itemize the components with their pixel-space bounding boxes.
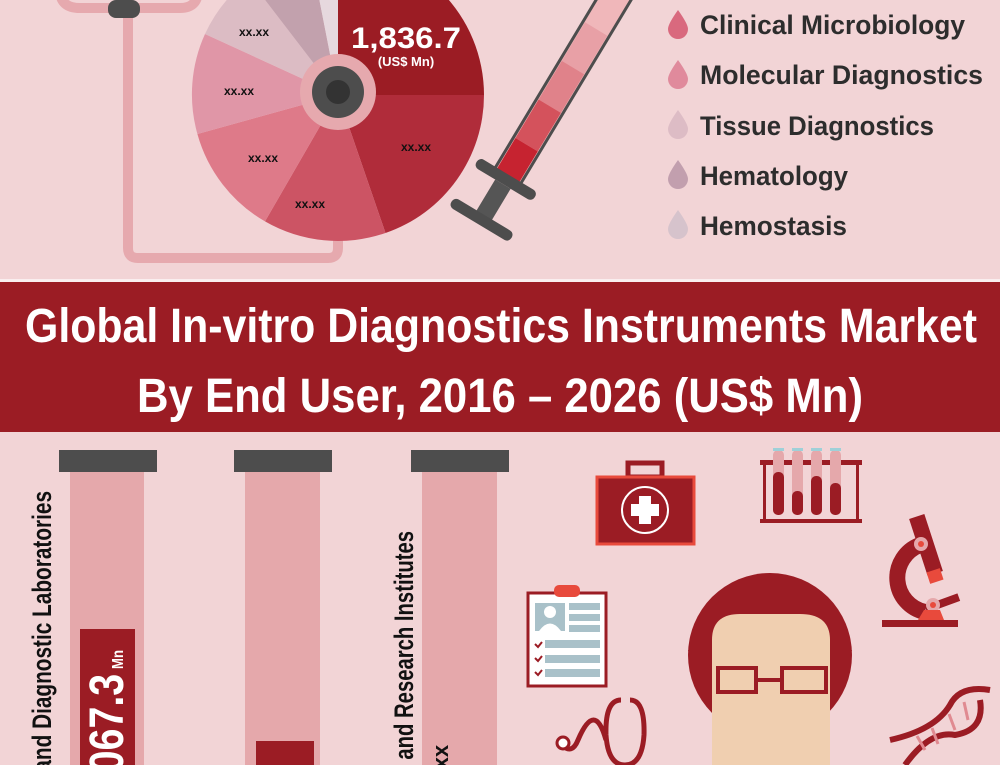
stethoscope tube around pie [60,0,338,258]
icon: microscope [882,514,960,627]
bar: second end user [234,450,332,765]
pie chart: xx.xx [239,25,269,39]
pie chart: xx.xx [248,151,278,165]
icon: chestpiece [300,54,376,130]
icon: stethoscope small [557,700,644,765]
icon: clipboard [528,585,606,686]
legend item: Molecular Diagnostics: Molecular Diagnostics [700,60,983,90]
pie chart: xx.xx [295,197,325,211]
pie chart: (US$ Mn) [378,54,434,69]
title banner [0,279,1000,432]
icon: syringe [449,0,660,242]
icon: stethoscope knob [108,0,140,18]
bar: Academic and Research Institutes [389,450,509,765]
icon: doctor [688,573,852,765]
pie chart: xx.xx [401,140,431,154]
legend item: Clinical Microbiology: Clinical Microbiology [700,10,965,40]
legend [668,10,983,241]
bar: Hospitals and Diagnostic Laboratories [27,450,157,765]
legend item: Hemostasis: Hemostasis [700,211,847,241]
legend item: Tissue Diagnostics: Tissue Diagnostics [700,111,934,141]
icon: medical kit [597,463,694,544]
pie chart [192,0,484,241]
legend item: Hematology: Hematology [700,161,848,191]
title banner: By End User, 2016 – 2026 (US$ Mn) [137,370,863,423]
bar chart [27,450,509,765]
icon: test tube rack [760,448,862,523]
icon: DNA [890,689,990,765]
pie chart: 1,836.7 [351,22,461,55]
pie chart: xx.xx [224,84,254,98]
